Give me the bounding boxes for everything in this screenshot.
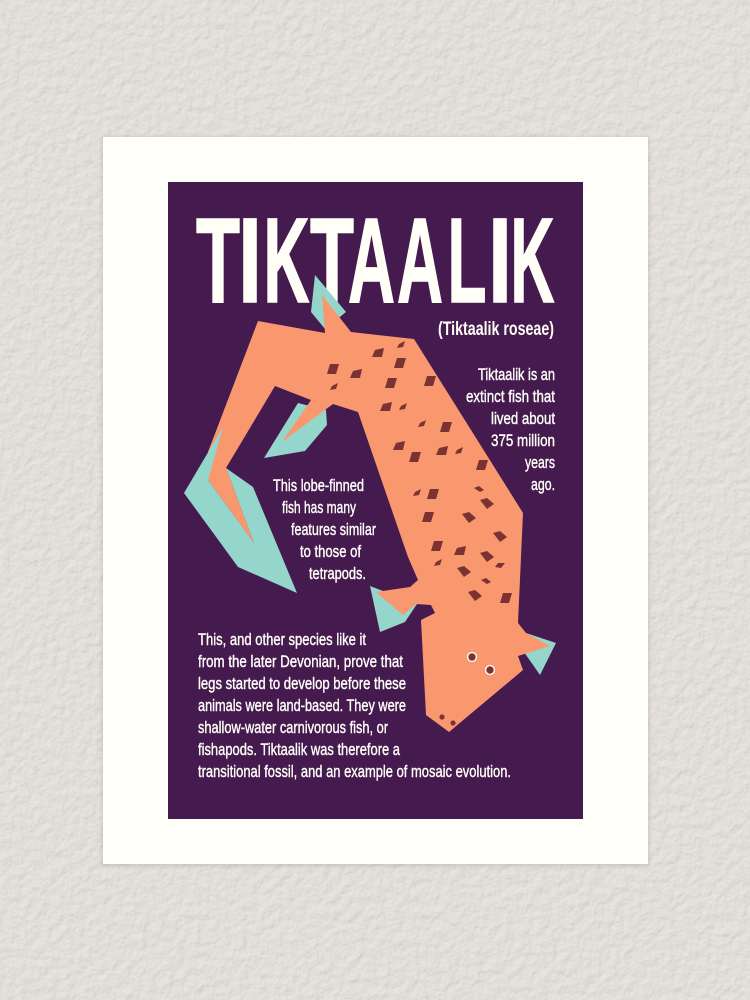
scientific name: (Tiktaalik roseae)	[438, 319, 554, 340]
white mat	[103, 137, 648, 864]
text block: lobe-finned fish: This lobe-finned	[273, 476, 364, 495]
eyes	[468, 653, 494, 674]
text block: transitional fossil: animals were land-based. They were	[198, 696, 406, 715]
text block: transitional fossil: This, and other species like it	[198, 630, 366, 649]
title: I	[238, 192, 262, 328]
text block: transitional fossil: fishapods. Tiktaalik was therefore a	[198, 740, 400, 759]
title: K	[264, 192, 310, 328]
text block: lobe-finned fish: fish has many	[282, 498, 356, 517]
body	[208, 295, 550, 732]
fin: right front	[517, 633, 556, 675]
text block: transitional fossil	[198, 630, 511, 781]
text block: lobe-finned fish: to those of	[300, 542, 361, 561]
text block: what it is: 375 million	[491, 431, 555, 450]
fin: top hind	[311, 275, 346, 329]
title: A	[348, 192, 395, 328]
text block: transitional fossil: transitional fossil, and an example of mosaic evolution.	[198, 762, 511, 781]
text block: what it is: extinct fish that	[466, 387, 555, 406]
title: K	[510, 192, 554, 328]
fin: left front	[370, 586, 417, 632]
text block: transitional fossil: shallow-water carnivorous fish, or	[198, 718, 388, 737]
text block: what it is	[466, 365, 555, 494]
text block: what it is: Tiktaalik is an	[478, 365, 555, 384]
illustration: tiktaalik	[184, 275, 556, 732]
title: T	[310, 192, 354, 328]
title	[196, 192, 554, 328]
fin: lower hind	[264, 403, 327, 458]
text block: lobe-finned fish: tetrapods.	[309, 564, 366, 583]
title: T	[196, 192, 240, 328]
text block: what it is: lived about	[491, 409, 555, 428]
fin: tail	[184, 427, 297, 593]
body scales	[327, 341, 512, 603]
title: A	[397, 192, 443, 328]
text block: what it is: ago.	[531, 475, 555, 494]
text block: transitional fossil: legs started to develop before these	[198, 674, 406, 693]
text block: transitional fossil: from the later Devonian, prove that	[198, 652, 403, 671]
text block: what it is: years	[525, 453, 555, 472]
purple poster panel	[168, 182, 583, 819]
title: L	[448, 192, 486, 328]
text block: lobe-finned fish: features similar	[291, 520, 376, 539]
title: I	[488, 192, 512, 328]
text block: lobe-finned fish	[273, 476, 376, 583]
nostrils	[439, 714, 456, 726]
